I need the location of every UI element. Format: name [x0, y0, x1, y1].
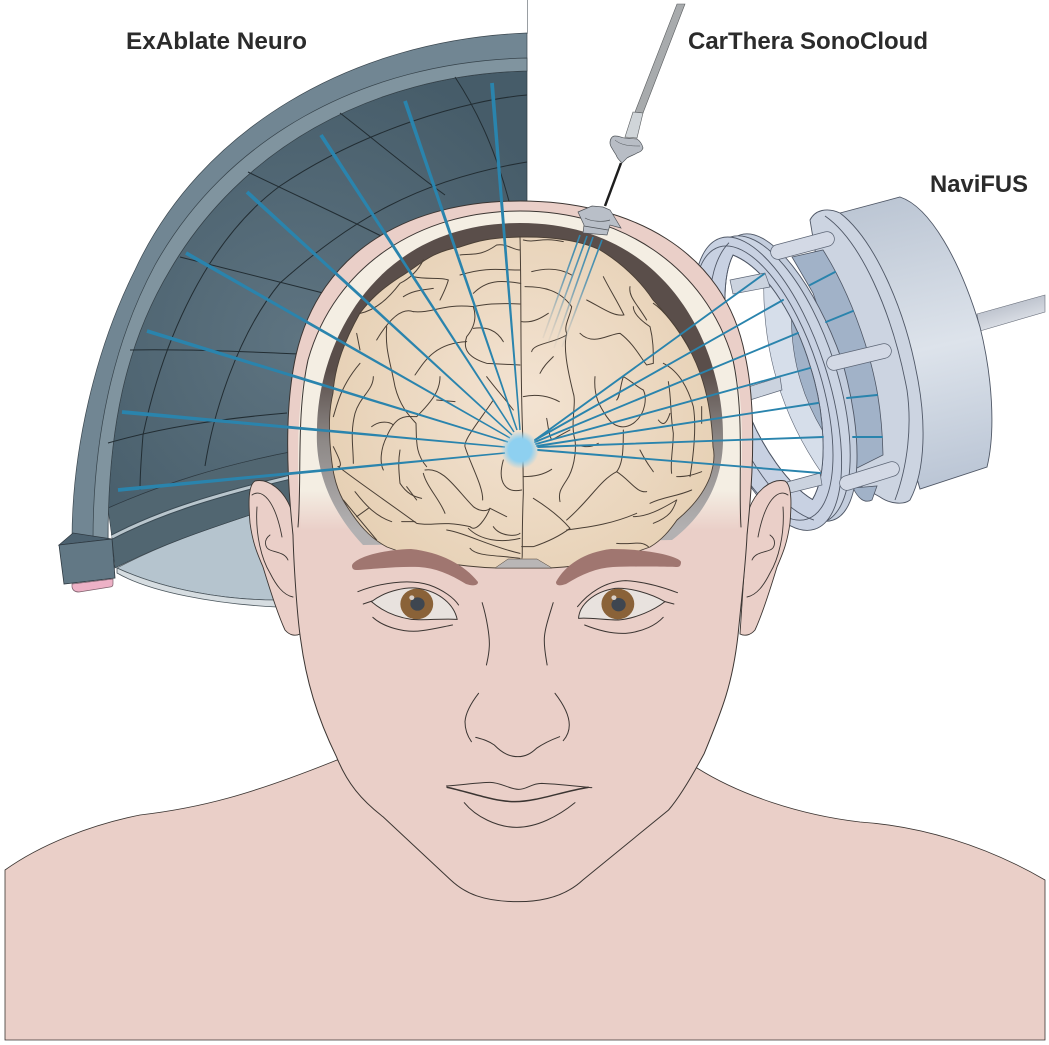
ear details: [252, 493, 788, 597]
ear: right: [740, 481, 791, 635]
eye: right: [577, 581, 677, 633]
helmet transducer grid: [108, 77, 527, 490]
implant body: [578, 206, 621, 235]
device: NaviFUS transducer: [698, 196, 1046, 531]
helmet lower band: [108, 450, 300, 568]
ultrasound rays: ExAblate: [118, 83, 521, 492]
NaviFUS lower band crescent: [853, 486, 877, 501]
eye: left: [358, 582, 459, 631]
NaviFUS rear housing: [840, 197, 992, 489]
NaviFUS pegs: [778, 239, 892, 483]
mouth: [446, 782, 592, 827]
catheter connector: [625, 112, 643, 138]
frontal sinus: [495, 559, 552, 568]
eyebrow: right: [556, 549, 681, 585]
head: scalp and face: [293, 520, 747, 902]
NaviFUS flange: [810, 210, 923, 503]
helmet interior: [108, 71, 527, 508]
ultrasound rays: NaviFUS: [535, 272, 882, 473]
helmet base plate: [117, 500, 300, 600]
face features: [358, 581, 677, 827]
device: CarThera SonoCloud catheter: [605, 4, 685, 206]
implant beams: [543, 235, 602, 348]
catheter flare: [610, 136, 643, 163]
NaviFUS cable: [977, 295, 1045, 331]
brain surface: [329, 237, 714, 568]
helmet plate rim: [117, 568, 300, 607]
NaviFUS struts: [730, 273, 822, 493]
brain sulci: [333, 237, 702, 558]
ear: left: [249, 481, 300, 635]
helmet outer shell: [72, 33, 527, 540]
helmet clamp: [59, 533, 115, 584]
label: NaviFUS: NaviFUS: [930, 171, 1028, 198]
body: shoulders: [5, 760, 1045, 1040]
brain: [329, 237, 714, 568]
NaviFUS dark band: [792, 250, 883, 470]
scalp: [288, 201, 753, 535]
focal point: [501, 431, 539, 469]
nose: [465, 603, 569, 757]
SonoCloud implant: [543, 206, 621, 348]
helmet pink pad: [72, 579, 113, 592]
catheter wire: [605, 163, 621, 206]
NaviFUS ring assembly: [698, 233, 858, 531]
catheter cable: [635, 4, 685, 113]
label: CarThera SonoCloud: CarThera SonoCloud: [688, 28, 928, 55]
helmet lip: [112, 476, 295, 537]
device: ExAblate Neuro hemispherical helmet: [59, 0, 528, 607]
dura layer: [317, 223, 723, 545]
label: ExAblate Neuro: ExAblate Neuro: [126, 28, 307, 55]
eyebrow: left: [352, 549, 478, 585]
skull: [298, 211, 742, 532]
